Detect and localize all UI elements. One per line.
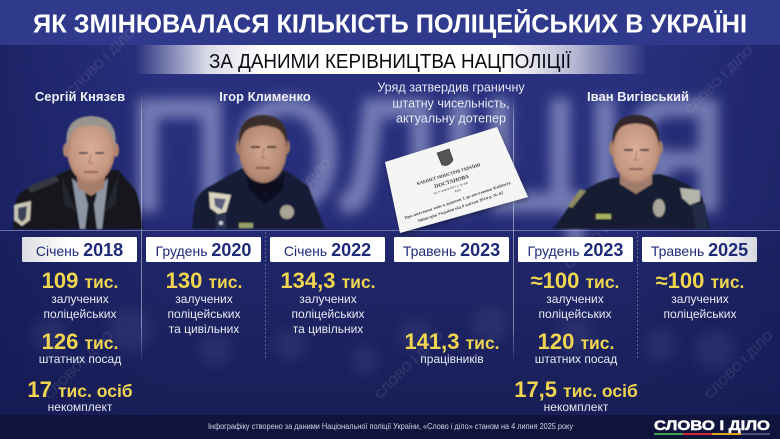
government note: Уряд затвердив граничну bbox=[377, 80, 525, 94]
resolution document: від 9 травня 2023 р. № 490 bbox=[433, 181, 469, 195]
title: ЯК ЗМІНЮВАЛАСЯ КІЛЬКІСТЬ ПОЛІЦЕЙСЬКИХ В УКРАЇНІ bbox=[33, 8, 747, 38]
stats: Dec 2023: 17,5 тис. осіб bbox=[514, 377, 638, 402]
column dividers bbox=[0, 95, 780, 365]
stats: Dec 2023: 120 тис. bbox=[538, 329, 614, 354]
blurred crowd backdrop bbox=[32, 307, 735, 374]
name: Ігор Клименко: Ігор Клименко bbox=[219, 89, 311, 104]
stats: May 2023: 141,3 тис. bbox=[404, 329, 500, 354]
stats: 2018: 17 тис. осіб bbox=[27, 377, 133, 402]
stats: 2018: некомплект bbox=[48, 400, 113, 414]
stats: 2025: поліцейських bbox=[664, 307, 736, 321]
stats: 2018: залучених bbox=[51, 292, 109, 306]
stats: 2020: та цивільних bbox=[169, 322, 239, 336]
date card: Грудень 2020 bbox=[146, 237, 261, 262]
subtitle band: ЗА ДАНИМИ КЕРІВНИЦТВА НАЦПОЛІЦІЇ bbox=[209, 51, 571, 73]
footer note: Інфографіку створено за даними Національної поліції України, «Слово і діло» станом на 4 липня 2025 року bbox=[208, 421, 574, 431]
stats: 2018: штатних посад bbox=[39, 352, 121, 366]
logo: СЛОВО І ДІЛО bbox=[654, 417, 770, 433]
stats: 2025 bbox=[656, 268, 744, 321]
stats: 2022: поліцейських bbox=[292, 307, 364, 321]
watermarks: СЛОВО І ДІЛО bbox=[682, 43, 756, 117]
stats: 2022: 134,3 тис. bbox=[280, 268, 376, 293]
watermarks: СЛОВО І ДІЛО bbox=[260, 156, 334, 230]
stats: 2020: залучених bbox=[175, 292, 233, 306]
stats: 2018 bbox=[27, 268, 133, 414]
stats: Dec 2023: поліцейських bbox=[539, 307, 611, 321]
subtitle band bbox=[135, 45, 647, 74]
stats: 2025: залучених bbox=[671, 292, 729, 306]
stats: 2018: поліцейських bbox=[44, 307, 116, 321]
stats: 2020 bbox=[166, 268, 242, 336]
stats: Dec 2023: штатних посад bbox=[535, 352, 617, 366]
name: Сергій Князєв: Сергій Князєв bbox=[35, 89, 125, 104]
footer band bbox=[0, 415, 780, 439]
resolution document: Київ bbox=[454, 188, 462, 193]
date card: Травень 2025: Травень 2025 bbox=[651, 240, 748, 260]
name: Іван Вигівський: Іван Вигівський bbox=[587, 89, 689, 104]
stats: Dec 2023: залучених bbox=[546, 292, 604, 306]
icon: trident bbox=[437, 149, 453, 165]
date card: Травень 2023: Травень 2023 bbox=[403, 240, 500, 260]
watermarks: СЛОВО І ДІЛО bbox=[42, 328, 116, 402]
stats: Dec 2023 bbox=[514, 268, 638, 414]
stats: 2022: та цивільних bbox=[293, 322, 363, 336]
resolution document bbox=[385, 127, 528, 233]
watermarks: СЛОВО І ДІЛО bbox=[562, 198, 636, 272]
portrait: Сергій Князєв bbox=[13, 116, 142, 229]
portrait: Іван Вигівський bbox=[553, 115, 710, 229]
date card: Грудень 2020: Грудень 2020 bbox=[156, 240, 251, 260]
stats: May 2023 bbox=[404, 329, 500, 366]
date card: Грудень 2023 bbox=[518, 237, 633, 262]
stats: Dec 2023: ≈100 тис. bbox=[531, 268, 619, 293]
watermarks: СЛОВО І ДІЛО bbox=[64, 25, 138, 99]
resolution document: КАБІНЕТ МІНІСТРІВ УКРАЇНИ bbox=[416, 162, 481, 186]
resolution document: Про внесення змін в додаток 1 до постанови Кабінету bbox=[404, 180, 511, 220]
resolution document: Міністрів України від 9 квітня 2014 р. № 65 bbox=[417, 190, 504, 223]
portrait: Ігор Клименко bbox=[192, 115, 325, 229]
stats: 2020: поліцейських bbox=[168, 307, 240, 321]
government note: актуальну дотепер bbox=[396, 112, 506, 126]
stats: 2020: 130 тис. bbox=[166, 268, 242, 293]
date card: Січень 2022 bbox=[270, 237, 385, 262]
resolution document: ПОСТАНОВА bbox=[434, 174, 470, 190]
stats: 2025: ≈100 тис. bbox=[656, 268, 744, 293]
stats: 2018: 109 тис. bbox=[42, 268, 118, 293]
watermarks: СЛОВО І ДІЛО bbox=[702, 328, 776, 402]
date card: Грудень 2023: Грудень 2023 bbox=[528, 240, 623, 260]
stats: Dec 2023: некомплект bbox=[544, 400, 609, 414]
government note bbox=[377, 80, 525, 126]
watermarks: СЛОВО І ДІЛО bbox=[372, 328, 446, 402]
stats: 2022: залучених bbox=[299, 292, 357, 306]
date card: Травень 2023 bbox=[394, 237, 509, 262]
government note: штатну чисельність, bbox=[392, 96, 510, 110]
stats: 2018: 126 тис. bbox=[42, 329, 118, 354]
date card: Січень 2018 bbox=[22, 237, 137, 262]
stats: May 2023: працівників bbox=[420, 352, 484, 366]
date card: Січень 2022: Січень 2022 bbox=[284, 240, 371, 260]
stats: 2022 bbox=[280, 268, 376, 336]
date card: Січень 2018: Січень 2018 bbox=[36, 240, 123, 260]
date card: Травень 2025 bbox=[642, 237, 757, 262]
